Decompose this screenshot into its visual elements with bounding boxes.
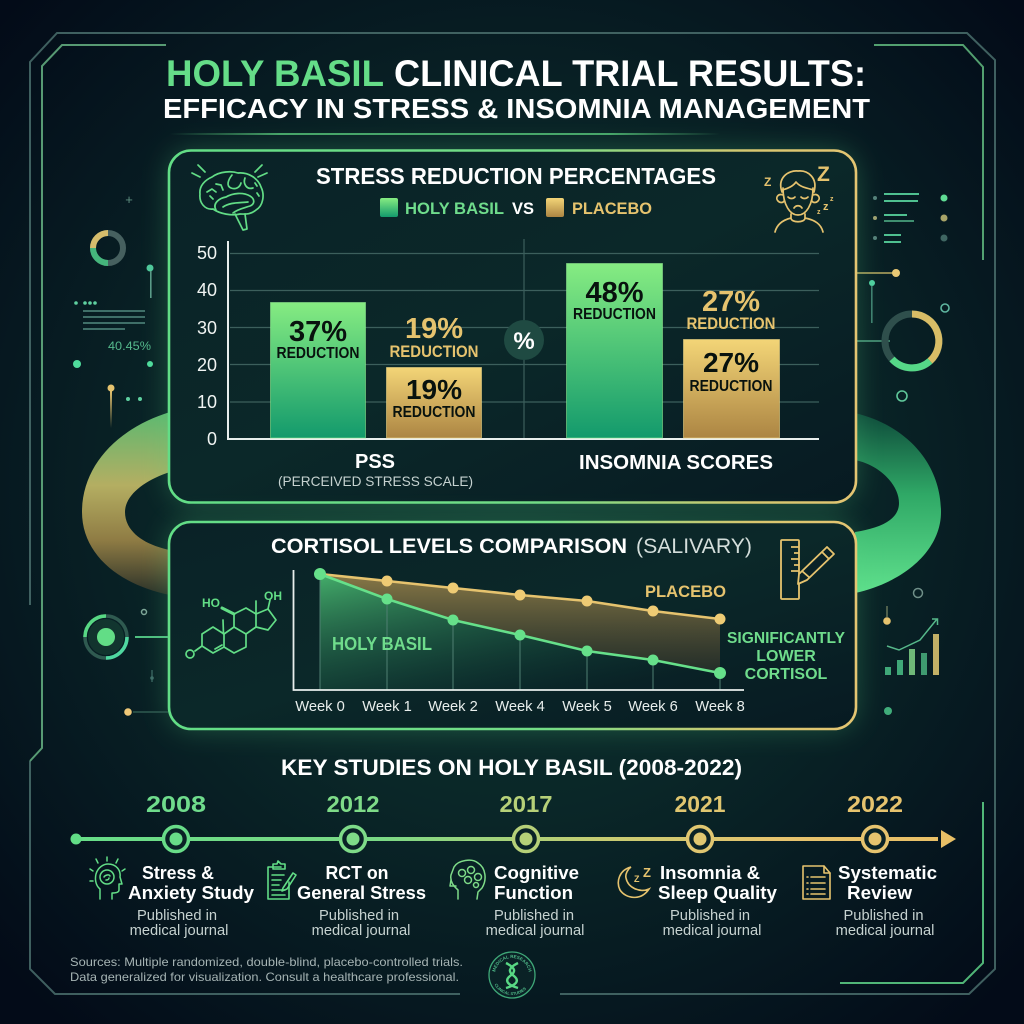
bar chart: 0 [207, 429, 217, 449]
study: systematic review: Systematic [838, 863, 937, 883]
study: cognitive function: Published in [494, 908, 574, 924]
milestone 2021: 2021 [674, 791, 726, 817]
study: stress and anxiety: Stress & [142, 863, 214, 883]
seal: medical research emblem: MEDICAL RESEARCH [492, 954, 532, 972]
study: stress and anxiety [90, 857, 254, 939]
milestone 2008 [146, 791, 206, 852]
timeline axis arrow [70, 830, 956, 848]
icon: document [803, 866, 830, 899]
legend: PLACEBO [572, 199, 652, 218]
study: stress and anxiety: medical journal [130, 923, 228, 939]
study: RCT on general stress: medical journal [312, 923, 410, 939]
chart heading: CORTISOL LEVELS COMPARISON [271, 535, 627, 558]
milestone 2008: 2008 [146, 791, 206, 817]
week labels: Week 2 [428, 699, 478, 715]
bar: PSS placebo: REDUCTION [390, 342, 478, 361]
callout: significantly lower cortisol [727, 630, 845, 683]
icon: sleeping person: z [817, 209, 821, 216]
milestone 2017 [500, 791, 552, 852]
bar chart: 50 [197, 243, 217, 263]
study: cognitive function: Function [494, 883, 573, 903]
icon: brain [192, 165, 267, 230]
title: EFFICACY IN STRESS & INSOMNIA MANAGEMENT [163, 93, 870, 124]
holy basil series [314, 568, 726, 679]
study: systematic review: medical journal [836, 923, 934, 939]
bar: insomnia holy basil: 48% [585, 277, 644, 309]
milestone 2017: 2017 [500, 791, 552, 817]
panel: stress reduction percentages [70, 138, 956, 999]
seal: medical research emblem: CLINICAL STUDIES [494, 984, 526, 995]
percent badge [504, 320, 544, 360]
milestone 2022: 2022 [847, 791, 903, 817]
chart heading: (SALIVARY) [636, 535, 752, 558]
icon: head with brain [90, 857, 125, 899]
icon: moon with z: Z [634, 874, 640, 884]
week labels: Week 0 [295, 699, 345, 715]
bar: insomnia placebo: REDUCTION [686, 314, 776, 333]
bar chart [197, 239, 819, 489]
study: stress and anxiety: Published in [137, 908, 217, 924]
category label: PSS: PSS [355, 451, 395, 473]
bar: PSS holy basil: 37% [289, 316, 347, 348]
legend: VS [512, 199, 534, 218]
title: CLINICAL TRIAL RESULTS: [394, 53, 866, 94]
title underline [170, 133, 720, 135]
icon: moon with z [618, 865, 651, 897]
study: systematic review [803, 863, 937, 939]
study: insomnia and sleep quality: Published in [670, 908, 750, 924]
bar: insomnia placebo: 27% [702, 286, 760, 318]
timeline heading: KEY STUDIES ON HOLY BASIL (2008-2022) [281, 755, 742, 780]
icon: sleeping person [764, 163, 834, 232]
study: insomnia and sleep quality: medical journal [663, 923, 761, 939]
timeline [70, 791, 956, 852]
bar: PSS holy basil: REDUCTION [276, 345, 360, 362]
lower right decoration [883, 588, 939, 715]
legend [380, 198, 652, 218]
sources note: Sources: Multiple randomized, double-blind, placebo-controlled trials. [70, 955, 463, 969]
lower left decoration [85, 610, 168, 716]
bar chart: 30 [197, 318, 217, 338]
left decoration: + [125, 192, 133, 207]
study: RCT on general stress: RCT on [326, 863, 388, 883]
icon: head with gears [450, 860, 485, 899]
bar: insomnia holy basil [566, 264, 662, 438]
series label: placebo: PLACEBO [645, 582, 726, 601]
placebo series [320, 574, 726, 624]
panel: cortisol levels comparison [70, 510, 956, 999]
percent badge: % [513, 328, 535, 355]
category label: insomnia: INSOMNIA SCORES [579, 452, 773, 474]
title [163, 53, 870, 124]
icon: sleeping person: z [830, 196, 834, 203]
week labels: Week 8 [695, 699, 745, 715]
week labels: Week 1 [362, 699, 412, 715]
bar chart: 10 [197, 392, 217, 412]
week labels [295, 699, 745, 715]
sources note [70, 955, 463, 984]
icon: cortisol molecule: OH [264, 589, 282, 603]
milestone 2021 [674, 791, 726, 852]
icon: clipboard [268, 861, 296, 899]
connector loop: left [82, 412, 170, 595]
series label: holy basil: HOLY BASIL [332, 634, 432, 654]
week labels: Week 5 [562, 699, 612, 715]
study: systematic review: Published in [843, 908, 924, 924]
bar: insomnia placebo [684, 286, 780, 438]
milestone 2012: 2012 [326, 791, 380, 817]
left decoration: 40.45% [108, 339, 151, 353]
category label: PSS: (PERCEIVED STRESS SCALE) [278, 473, 473, 489]
bar chart: 20 [197, 355, 217, 375]
bar: insomnia placebo: REDUCTION [690, 378, 772, 395]
bar: insomnia placebo: 27% [703, 347, 759, 378]
bar: insomnia holy basil: REDUCTION [573, 306, 656, 323]
study: cognitive function: Cognitive [494, 863, 579, 883]
icon: sleeping person: Z [817, 163, 830, 186]
icon: sleeping person: z [823, 201, 829, 213]
icon: cortisol molecule [186, 589, 282, 658]
study: RCT on general stress: General Stress [297, 883, 426, 903]
icon: cortisol molecule: HO [202, 596, 220, 610]
study: insomnia and sleep quality: Sleep Quality [658, 883, 777, 903]
title: HOLY BASIL [166, 53, 384, 94]
category label: PSS [278, 451, 473, 489]
bar: PSS placebo: REDUCTION [392, 404, 476, 421]
callout: significantly lower cortisol: CORTISOL [745, 666, 828, 683]
icon: moon with z: Z [643, 865, 651, 880]
right decoration [856, 193, 949, 401]
study: insomnia and sleep quality [618, 863, 777, 939]
line chart [294, 568, 745, 715]
bar: PSS placebo [386, 313, 482, 438]
study: systematic review: Review [847, 883, 913, 903]
sources note: Data generalized for visualization. Consult a healthcare professional. [70, 970, 459, 984]
week labels: Week 6 [628, 699, 678, 715]
connector loop: right [855, 413, 941, 593]
study: RCT on general stress: Published in [319, 908, 399, 924]
chart heading: STRESS REDUCTION PERCENTAGES [316, 163, 716, 189]
left decoration [73, 192, 154, 428]
seal: medical research emblem [488, 951, 536, 999]
milestone 2022 [847, 791, 903, 852]
bar: PSS holy basil [270, 302, 366, 438]
callout: significantly lower cortisol: SIGNIFICANTLY [727, 630, 845, 647]
study: RCT on general stress [268, 861, 426, 939]
legend: HOLY BASIL [405, 199, 504, 218]
milestone 2012 [326, 791, 380, 852]
bar chart: 40 [197, 280, 217, 300]
bar: PSS placebo: 19% [406, 374, 462, 405]
callout: significantly lower cortisol: LOWER [756, 648, 816, 665]
icon: sleeping person: Z [764, 175, 771, 189]
bar: PSS placebo: 19% [405, 313, 463, 345]
icon: ruler and pencil [781, 540, 834, 599]
study: insomnia and sleep quality: Insomnia & [660, 863, 760, 883]
week labels: Week 4 [495, 699, 545, 715]
study: stress and anxiety: Anxiety Study [128, 883, 254, 903]
study: cognitive function [450, 860, 584, 939]
study: cognitive function: medical journal [486, 923, 584, 939]
